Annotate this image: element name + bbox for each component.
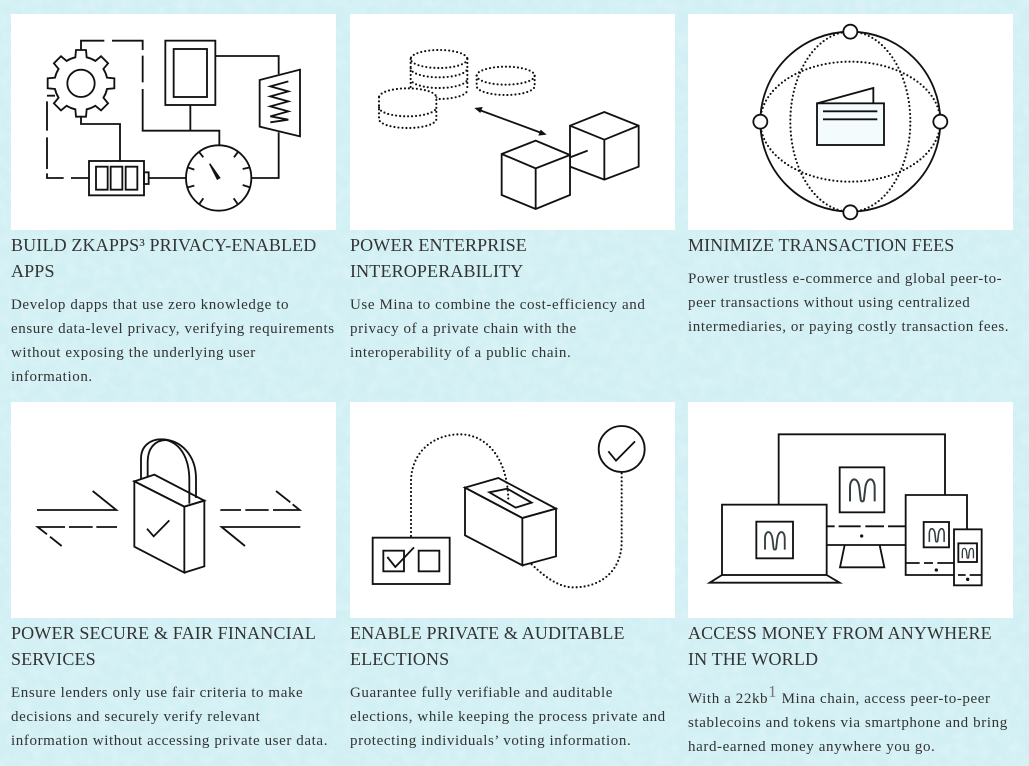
heading: BUILD ZKAPPS³ PRIVACY-ENABLED: [11, 235, 316, 255]
icon: wallet inside globe: [688, 14, 1013, 230]
icon: ballot, ballot box and check: [350, 402, 675, 618]
panel: minimize transaction fees: [688, 14, 1013, 335]
heading: INTEROPERABILITY: [350, 261, 523, 281]
body text: With a 22kb1 Mina chain, access peer-to-peer: [688, 682, 991, 707]
heading: IN THE WORLD: [688, 649, 818, 669]
body text: hard-earned money anywhere you go.: [688, 739, 935, 755]
body text: [688, 271, 1009, 335]
panel: access money anywhere: [688, 402, 1013, 755]
panel: build zkapps: [11, 14, 336, 385]
heading: POWER SECURE & FAIR FINANCIAL: [11, 623, 316, 643]
body text: protecting individuals’ voting information.: [350, 733, 631, 749]
icon: dotted coin stacks and linked cubes: [350, 14, 675, 230]
heading: ELECTIONS: [350, 649, 449, 669]
body text: information without accessing private user data.: [11, 733, 328, 749]
body text: [350, 685, 666, 749]
body text: [11, 297, 335, 385]
body text: [350, 297, 645, 361]
heading: [11, 235, 316, 281]
body text: stablecoins and tokens via smartphone and bring: [688, 715, 1008, 731]
body text: Use Mina to combine the cost-efficiency and: [350, 297, 645, 313]
heading: [350, 623, 625, 669]
body text: Ensure lenders only use fair criteria to make: [11, 685, 303, 701]
body text: [11, 685, 328, 749]
heading: ENABLE PRIVATE & AUDITABLE: [350, 623, 625, 643]
body text: without exposing the underlying user: [11, 345, 256, 361]
body text: elections, while keeping the process private and: [350, 709, 666, 725]
body text: ensure data-level privacy, verifying requirements: [11, 321, 335, 337]
body text: Guarantee fully verifiable and auditable: [350, 685, 613, 701]
body text: peer transactions without using centralized: [688, 295, 970, 311]
body text: information.: [11, 369, 93, 385]
body text: decisions and securely verify relevant: [11, 709, 260, 725]
heading: [688, 623, 992, 669]
icon: padlock with exchange arrows: [11, 402, 336, 618]
heading: APPS: [11, 261, 55, 281]
body text: interoperability of a public chain.: [350, 345, 571, 361]
icon: laptop, monitor, tablet and phone with Mina logos: [688, 402, 1013, 618]
panel: secure financial services: [11, 402, 336, 749]
panel: private auditable elections: [350, 402, 675, 749]
heading: [11, 623, 316, 669]
body text: Power trustless e-commerce and global peer-to-: [688, 271, 1002, 287]
icon: circuit with gear, screen, battery, gauge: [11, 14, 336, 230]
body text: Develop dapps that use zero knowledge to: [11, 297, 289, 313]
heading: MINIMIZE TRANSACTION FEES: [688, 235, 954, 255]
heading: SERVICES: [11, 649, 96, 669]
body text: privacy of a private chain with the: [350, 321, 577, 337]
heading: ACCESS MONEY FROM ANYWHERE: [688, 623, 992, 643]
heading: [350, 235, 527, 281]
body text: [688, 682, 1008, 755]
heading: POWER ENTERPRISE: [350, 235, 527, 255]
body text: intermediaries, or paying costly transaction fees.: [688, 319, 1009, 335]
panel: enterprise interoperability: [350, 14, 675, 361]
